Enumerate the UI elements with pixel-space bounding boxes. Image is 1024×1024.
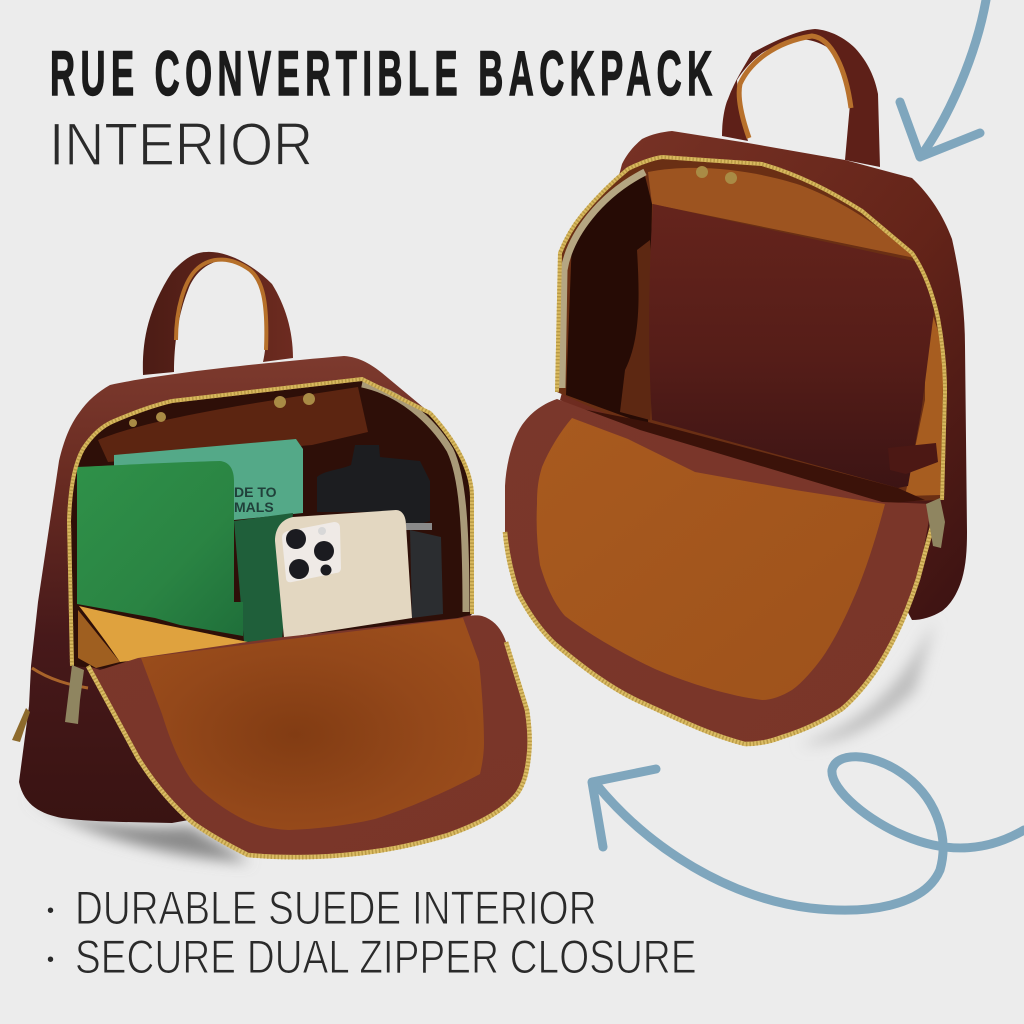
green leather notebook [77,461,243,636]
title: RUE CONVERTIBLE BACKPACK [50,38,712,109]
tan pouch [78,606,248,668]
book cover title: DE TO [234,484,277,500]
phone camera block [282,522,341,582]
backpack right: empty open [505,29,967,745]
teal book [114,439,303,520]
upper suede back panel [98,387,368,462]
feature list [47,882,697,984]
interior pocket [649,204,935,488]
handle orange edge [176,260,266,350]
flap leather rim [505,399,932,744]
left wall [566,176,652,425]
handle [143,252,293,375]
scalloped liner [362,384,466,612]
water bottle [317,445,443,618]
bullet: secure dual zipper closure: SECURE DUAL ZIPPER CLOSURE [75,931,697,984]
bullet: durable suede interior: DURABLE SUEDE INTERIOR [75,882,597,935]
interior opening [69,379,472,680]
backpack left: packed [12,252,530,862]
book cover title: MALS [234,499,274,515]
bullet: durable suede interior: • [47,900,54,922]
body [560,131,967,620]
right suede wall [905,290,944,496]
bullet: secure dual zipper closure: • [47,949,54,971]
arrow: bottom looping to open backpack [592,757,1024,910]
body zipper [557,157,945,500]
interior opening [557,157,945,502]
flap zipper [505,512,936,744]
left wall suede fold [620,240,656,420]
bottom dark strip [567,406,925,504]
brass rivets [696,166,737,184]
subtitle: INTERIOR [49,111,313,178]
flap suede lining [141,618,484,830]
ground shadow [800,620,935,745]
flap suede lining [537,418,885,700]
side strap buckle [12,708,30,742]
brass rivets [129,393,315,427]
body zipper [69,379,472,666]
ground shadow [26,796,250,862]
handle [722,29,880,167]
arrow: top right pointing to open backpack [900,0,986,157]
zipper pull [926,498,945,548]
green second book [234,513,293,642]
phone [275,510,412,638]
pocket tab [888,443,938,474]
handle orange edge [739,36,851,138]
body [19,356,472,823]
scalloped liner [562,172,645,388]
book cover title [234,484,277,515]
seam at waist [32,668,88,688]
flap leather rim [88,615,530,857]
flap zipper [88,642,530,857]
top suede band [648,168,915,258]
zipper pull [65,665,84,724]
